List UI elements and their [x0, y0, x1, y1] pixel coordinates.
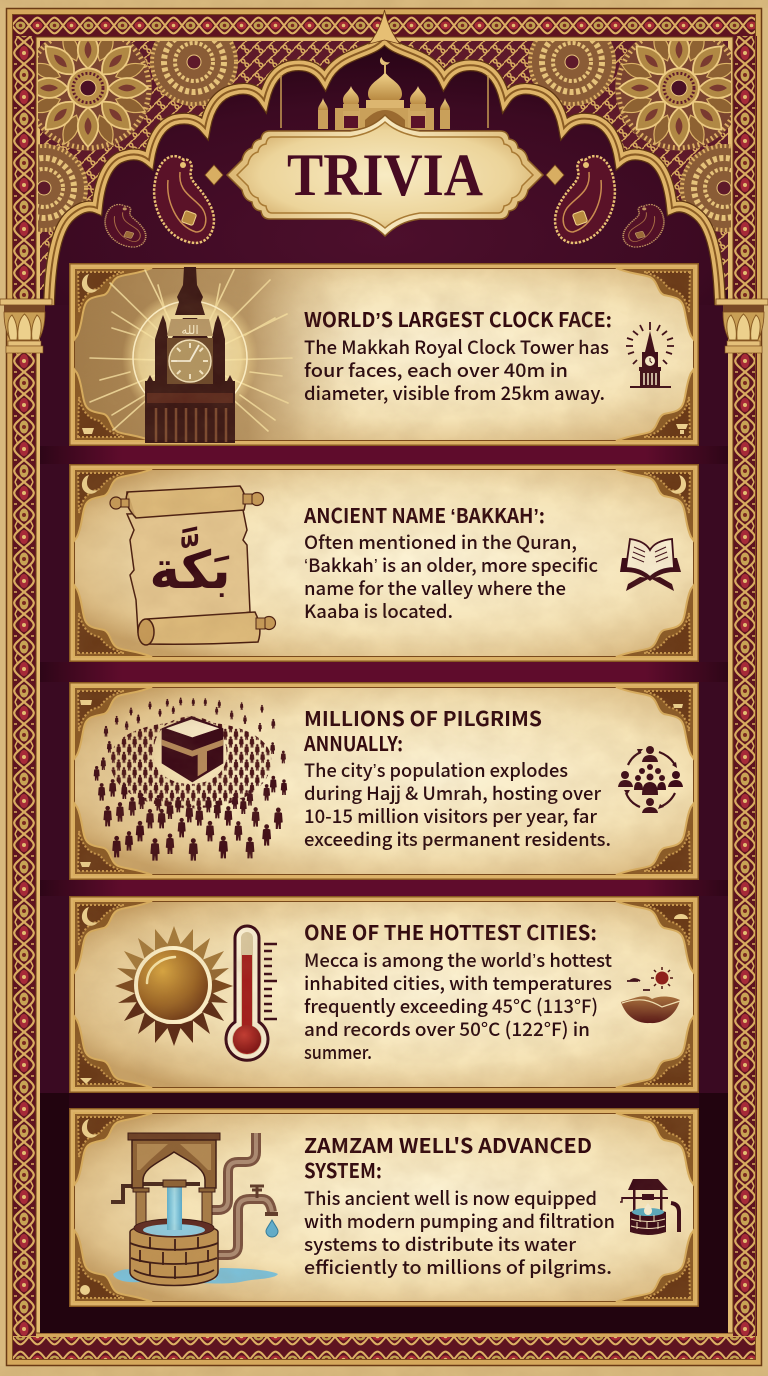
body text	[304, 757, 611, 852]
diamond finials	[205, 165, 564, 185]
icon: people cycle	[618, 746, 683, 813]
heading: ONE OF THE HOTTEST CITIES:	[304, 916, 597, 946]
panel: one of the hottest cities	[69, 896, 699, 1093]
heading: ANNUALLY:	[303, 727, 403, 757]
heading	[303, 702, 542, 757]
panel: millions of pilgrims	[69, 682, 699, 880]
icon: desert and sun	[621, 967, 680, 1023]
illustration: thermometer	[226, 926, 277, 1060]
illustration: zamzam well with pipes	[111, 1133, 278, 1286]
illustration: sun	[115, 926, 233, 1046]
well canopy	[128, 1133, 220, 1140]
dense inner crowd, row A	[110, 717, 271, 808]
dense inner crowd, row B	[110, 717, 271, 808]
body text: four faces, each over 40m in	[304, 357, 568, 383]
tower body	[145, 267, 235, 443]
columns	[136, 1190, 146, 1228]
body text: The Makkah Royal Clock Tower has	[304, 334, 609, 360]
body text: 10-15 million visitors per year, far	[304, 803, 597, 829]
arabic word: بَكَّة	[149, 526, 231, 601]
crank handle	[111, 1184, 200, 1202]
heading: MILLIONS OF PILGRIMS	[304, 702, 542, 732]
heading: ANCIENT NAME ‘BAKKAH’:	[303, 499, 545, 529]
parchment grain overlay	[83, 269, 693, 1371]
pipes	[212, 1133, 256, 1210]
maroon interior	[40, 290, 728, 1333]
body text	[304, 334, 609, 406]
title: TRIVIA	[287, 142, 483, 208]
rosette: top left large	[38, 41, 152, 151]
column capitals	[0, 299, 768, 353]
body text: summer.	[304, 1039, 372, 1065]
panel frame	[69, 682, 699, 880]
heading: WORLD’S LARGEST CLOCK FACE:	[304, 303, 612, 333]
spandrel ornament panel	[38, 41, 731, 290]
panel: zamzam well	[69, 1108, 699, 1307]
title plaque	[205, 115, 564, 236]
body text: Often mentioned in the Quran,	[304, 529, 577, 555]
puddle	[113, 1268, 278, 1284]
sun rays	[90, 270, 292, 431]
icon: clock tower	[626, 322, 674, 388]
panel frame	[69, 263, 699, 446]
panel: ancient name Bakkah	[69, 464, 699, 662]
body text: inhabited cities, with temperatures	[304, 970, 612, 996]
panel frame	[69, 896, 699, 1093]
heading	[304, 1129, 592, 1184]
mosque skyline	[281, 57, 488, 130]
body text: with modern pumping and filtration	[304, 1208, 615, 1234]
body text: systems to distribute its water	[304, 1231, 576, 1257]
panel frame	[69, 464, 699, 662]
body text: frequently exceeding 45°C (113°F)	[304, 993, 598, 1019]
panel frame	[69, 1108, 699, 1307]
icon: open book on stand	[620, 539, 681, 591]
body text: name for the valley where the	[304, 575, 566, 601]
kaaba	[162, 716, 223, 782]
body text: during Hajj & Umrah, hosting over	[304, 780, 601, 806]
illustration: crowd around the kaaba	[94, 698, 287, 861]
main dome	[368, 72, 402, 100]
clock plate text: الله	[181, 323, 199, 337]
body text: ‘Bakkah’ is an older, more specific	[304, 552, 598, 578]
paisley motifs	[105, 156, 664, 247]
well stone cylinder	[130, 1224, 218, 1286]
illustration: clock tower with rays	[90, 267, 292, 443]
body text: This ancient well is now equipped	[304, 1185, 597, 1211]
body text	[304, 529, 598, 624]
body text: diameter, visible from 25km away.	[304, 380, 605, 406]
body text	[304, 947, 613, 1065]
body text	[304, 1185, 615, 1280]
rosette: top right large	[615, 41, 731, 151]
heading: ZAMZAM WELL'S ADVANCED	[304, 1129, 592, 1159]
heading: SYSTEM:	[304, 1154, 382, 1184]
body text: Kaaba is located.	[304, 598, 453, 624]
body text: The city’s population explodes	[304, 757, 568, 783]
panel: world's largest clock face	[69, 263, 699, 446]
falling water	[167, 1180, 182, 1230]
minaret lines	[281, 75, 488, 128]
illustration: scroll with arabic name	[110, 486, 276, 645]
body text: Mecca is among the world’s hottest	[304, 947, 613, 973]
body text: exceeding its permanent residents.	[304, 826, 611, 852]
icon: well	[620, 1179, 679, 1235]
body text: efficiently to millions of pilgrims.	[304, 1254, 612, 1280]
arch	[49, 10, 720, 305]
body text: and records over 50°C (122°F) in	[304, 1016, 590, 1042]
